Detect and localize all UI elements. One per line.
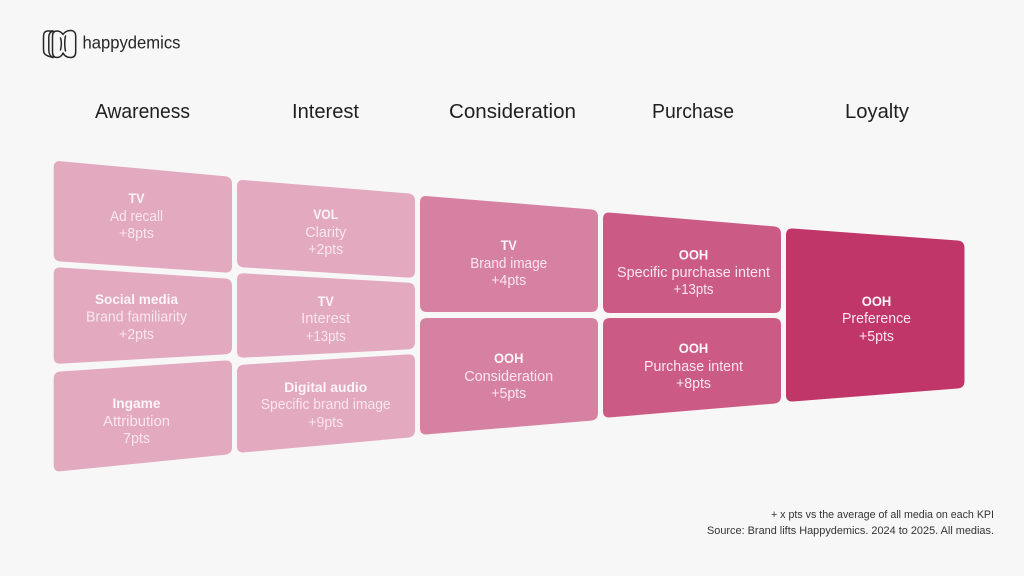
card text: Brand image: [470, 256, 547, 272]
card text: Consideration: [464, 369, 553, 385]
heading: Purchase: Purchase: [652, 101, 734, 123]
panel: Purchase OOH intent: [603, 318, 781, 417]
panel: Awareness Ingame: [54, 360, 232, 471]
card shape: [54, 360, 232, 471]
card text: [644, 340, 743, 392]
panel: Interest Digital audio: [237, 354, 415, 452]
card shape: [786, 228, 964, 402]
card shape: [237, 354, 415, 452]
panel: Consideration OOH: [420, 318, 598, 434]
card text: [470, 237, 547, 289]
heading: Consideration: Consideration: [449, 101, 576, 123]
heading: Awareness: Awareness: [95, 101, 190, 123]
card text: [86, 291, 188, 343]
card text: [305, 206, 347, 258]
card text: [617, 246, 770, 298]
card text: Preference: [842, 311, 911, 327]
card text: +4pts: [491, 273, 526, 289]
panel: Awareness TV: [54, 161, 232, 273]
card text: [103, 395, 170, 447]
source: Source: Brand lifts Happydemics. 2024 to 2025. All medias.: [707, 525, 994, 537]
icon: happydemics mark: [44, 30, 76, 58]
card text: Ingame: [112, 395, 161, 411]
card text: OOH: [862, 293, 891, 309]
card text: Specific purchase intent: [617, 265, 770, 281]
card text: Ad recall: [110, 209, 163, 225]
panel: Awareness Social media: [54, 267, 232, 364]
card text: Attribution: [103, 414, 170, 430]
card text: 7pts: [123, 431, 150, 447]
card text: +9pts: [308, 415, 343, 431]
card text: TV: [128, 190, 145, 206]
card text: +5pts: [859, 329, 894, 345]
card text: Digital audio: [284, 379, 367, 395]
panel: Interest VOL: [237, 180, 415, 278]
card text: +2pts: [119, 327, 154, 343]
card text: Social media: [95, 291, 178, 307]
card text: [261, 379, 391, 431]
logo: happydemics: [44, 30, 181, 58]
panel: Loyalty OOH: [786, 228, 964, 402]
panel: Consideration TV: [420, 196, 598, 312]
logo wordmark: happydemics: [82, 32, 181, 52]
card shape: [420, 196, 598, 312]
card shape: [603, 318, 781, 417]
card shape: [54, 161, 232, 273]
card text: +8pts: [119, 226, 154, 242]
card text: VOL: [313, 206, 339, 222]
card text: Clarity: [305, 225, 347, 241]
footnote: + x pts vs the average of all media on each KPI: [771, 509, 994, 521]
panel: Interest TV: [237, 273, 415, 358]
card text: TV: [318, 293, 334, 309]
heading: Interest: Interest: [292, 101, 359, 123]
card shape: [237, 273, 415, 358]
card text: Specific brand image: [261, 397, 391, 413]
card shape: [420, 318, 598, 434]
card text: +8pts: [676, 376, 711, 392]
card text: OOH: [679, 246, 708, 262]
card text: [842, 293, 911, 345]
card text: [110, 190, 163, 242]
card text: [301, 293, 350, 345]
card text: Brand familiarity: [86, 310, 188, 326]
card text: Interest: [301, 311, 350, 327]
heading: Loyalty: Loyalty: [845, 101, 909, 123]
card text: OOH: [679, 340, 708, 356]
card text: TV: [501, 237, 517, 253]
card text: OOH: [494, 350, 523, 366]
card text: +13pts: [674, 282, 714, 298]
card text: +2pts: [308, 242, 343, 258]
card text: +5pts: [491, 386, 526, 402]
panel: Purchase OOH specific: [603, 213, 781, 313]
card shape: [237, 180, 415, 278]
card shape: [603, 213, 781, 313]
card shape: [54, 267, 232, 364]
card text: Purchase intent: [644, 359, 743, 375]
card text: [464, 350, 553, 402]
card text: +13pts: [306, 329, 346, 345]
